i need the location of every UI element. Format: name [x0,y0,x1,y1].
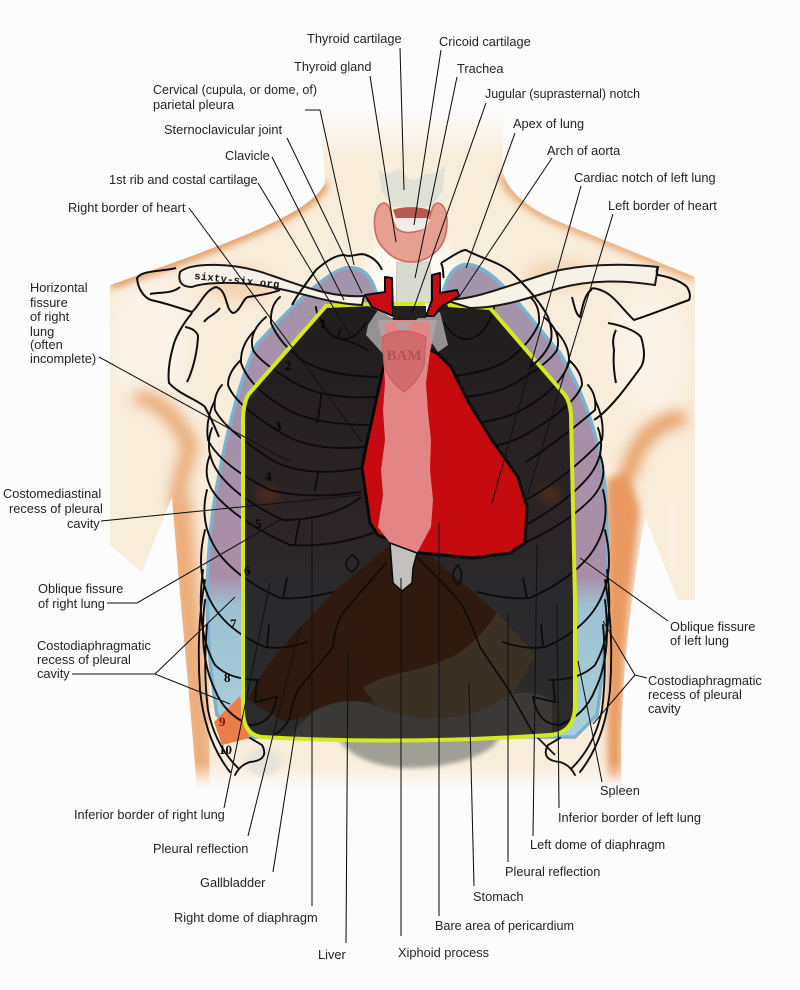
yellow pleural border [243,304,575,741]
label: Inferior border of left lung: Inferior border of left lung [558,810,701,825]
watermark shield: BAM [386,348,422,364]
dark overlay area [243,303,575,741]
label: Oblique fissure of right lung: of right lung [38,596,105,611]
great vessels [365,273,459,316]
label: Oblique fissure of left lung: Oblique fissure [670,619,755,634]
ascending colon lump [245,748,281,776]
label: Pleural reflection left: Pleural reflection [505,864,600,879]
label: Cervical parietal pleura: Cervical (cupula, or dome, of) [153,82,317,97]
label: Thyroid cartilage: Thyroid cartilage [307,31,402,46]
rib numbers: 10 [219,742,232,757]
xiphoid process [390,543,417,591]
label: Costomediastinal recess: recess of pleural [9,501,103,516]
label: Horizontal fissure: incomplete) [30,351,96,366]
label: Costodiaphragmatic recess right: Costodiaphragmatic [37,638,151,653]
label: Gallbladder: Gallbladder [200,875,266,890]
label: Horizontal fissure [30,280,96,366]
label: Right dome of diaphragm: Right dome of diaphragm [174,910,318,925]
label: Cardiac notch of left lung: Cardiac notch of left lung [574,170,716,185]
diaphragm lines [270,557,555,755]
label: Costomediastinal recess: cavity [67,516,100,531]
rib numbers: 5 [255,516,262,531]
rib numbers: 7 [230,616,237,631]
watermark shield [382,331,426,392]
label: Cervical parietal pleura [153,82,317,112]
label: Thyroid gland: Thyroid gland [294,59,372,74]
label: Cervical parietal pleura: parietal pleura [153,97,235,112]
label: Costodiaphragmatic recess left: recess of pleural [648,687,742,702]
leader lines [72,48,668,943]
transverse colon [290,692,552,741]
ribs right side of body [199,297,378,775]
label: Horizontal fissure: lung [30,324,54,339]
nipples [257,486,561,504]
clavicle left body [445,265,658,308]
rib numbers [219,316,326,757]
lung pleura left of body [442,264,608,737]
scapula left body [441,250,690,420]
dark band behind manubrium [393,306,426,318]
label: Jugular notch: Jugular (suprasternal) notch [485,86,640,101]
label: Arch of aorta: Arch of aorta [547,143,621,158]
watermark text: sixty-six.org [194,271,280,292]
icon: thyroid gland [374,203,447,262]
label: Xiphoid process: Xiphoid process [398,945,489,960]
label: Costomediastinal recess [3,486,103,531]
rib numbers: 1 [320,316,326,331]
label: Costodiaphragmatic recess left: Costodiaphragmatic [648,673,762,688]
colon below border [337,735,500,768]
orange liver tip [214,696,250,745]
label: Trachea: Trachea [457,61,504,76]
label: Left dome of diaphragm: Left dome of diaphragm [530,837,665,852]
label: Left border of heart: Left border of heart [608,198,717,213]
label: Inferior border of right lung: Inferior border of right lung [74,807,225,822]
label: 1st rib and costal cartilage: 1st rib and costal cartilage [109,172,258,187]
label: Right border of heart: Right border of heart [68,200,186,215]
rib numbers: 3 [275,418,282,433]
icon: thyroid cartilage [379,165,445,207]
label: Sternoclavicular joint: Sternoclavicular joint [164,122,283,137]
clavicle right body [179,265,364,305]
label: Oblique fissure of left lung [670,619,755,648]
label: Spleen: Spleen [600,783,640,798]
ribs left side of body [432,297,611,775]
label: Oblique fissure of left lung: of left lung [670,633,729,648]
label: Oblique fissure of right lung [38,581,123,611]
label: Costodiaphragmatic recess left [648,673,762,716]
rib numbers: 6 [244,563,251,578]
heart [362,340,527,558]
label: Horizontal fissure: of right [30,309,70,324]
rib numbers: 2 [285,358,292,373]
label: Pleural reflection right: Pleural reflection [153,841,248,856]
label: Costomediastinal recess: Costomediastinal [3,486,101,501]
gray pleura top [366,310,448,355]
label: Oblique fissure of right lung: Oblique fissure [38,581,123,596]
lung pleura right of body [207,268,378,737]
label: Costodiaphragmatic recess left: cavity [648,701,681,716]
label: Horizontal fissure: (often [30,337,63,352]
rib numbers: 9 [219,714,226,729]
abdomen stomach [363,612,535,719]
torso skin [100,110,710,800]
label: Cricoid cartilage: Cricoid cartilage [439,34,531,49]
label: Costodiaphragmatic recess right [37,638,151,681]
icon: trachea [396,262,431,303]
mediastinum pink [378,320,437,553]
label: Horizontal fissure: fissure [30,295,68,310]
scapula right body [137,254,382,437]
label: Clavicle: Clavicle [225,148,270,163]
label: Liver: Liver [318,947,346,962]
label: Horizontal fissure: Horizontal [30,280,88,295]
label: Stomach: Stomach [473,889,524,904]
label: Bare area of pericardium: Bare area of pericardium [435,918,574,933]
label: Costodiaphragmatic recess right: recess of pleural [37,652,131,667]
label: Costodiaphragmatic recess right: cavity [37,666,70,681]
rib numbers: 4 [265,469,272,484]
label: Apex of lung: Apex of lung [513,116,584,131]
rib numbers: 8 [224,670,231,685]
abdomen liver [248,545,528,722]
